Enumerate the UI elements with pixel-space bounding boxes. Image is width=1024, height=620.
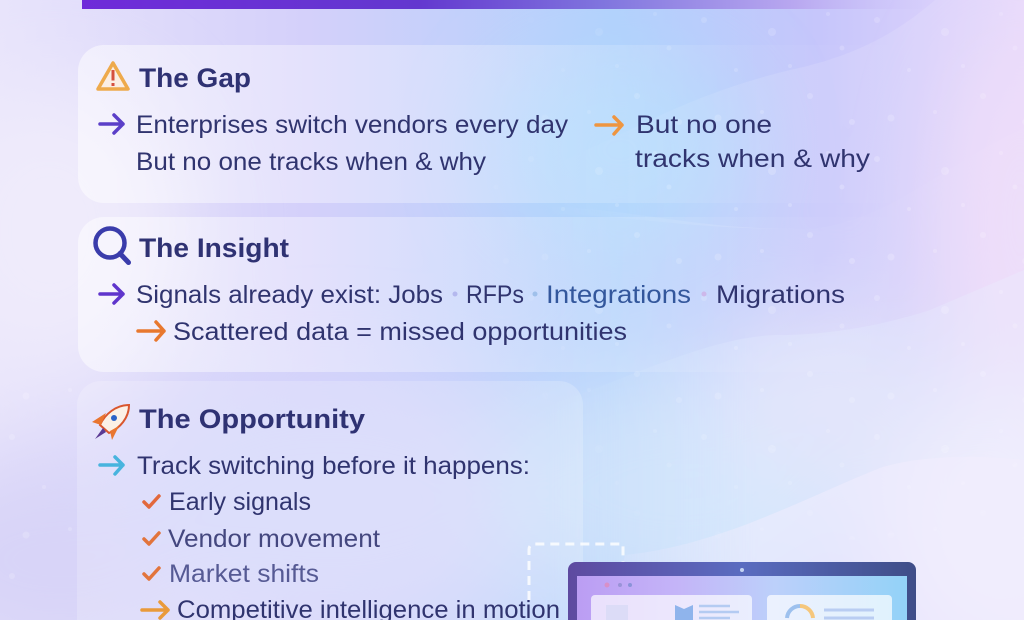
text: rfps: RFPs	[466, 281, 524, 309]
dashboard card right	[767, 595, 892, 620]
window controls	[604, 582, 632, 588]
wave layers	[624, 216, 1024, 620]
check icon	[144, 568, 159, 579]
text: enterprises switch: Enterprises switch vendors every day	[136, 111, 569, 139]
text: but no one: But no one	[636, 111, 772, 139]
text: migrations: Migrations	[716, 281, 845, 309]
laptop screen	[577, 576, 907, 620]
top banner	[82, 0, 922, 9]
check icon	[144, 496, 159, 507]
text: scattered data: Scattered data = missed opportunities	[173, 318, 627, 346]
dashed connector	[529, 544, 623, 600]
heading: the gap: The Gap	[139, 63, 251, 93]
icon: warning triangle	[98, 63, 128, 89]
text: tracks when and why: tracks when & why	[635, 145, 871, 173]
icon: magnifier	[96, 228, 128, 262]
heading: the opportunity: The Opportunity	[139, 404, 365, 434]
arrow: orange	[596, 117, 622, 134]
text: integrations: Integrations	[546, 281, 691, 309]
arrow: blue	[100, 457, 123, 474]
dashboard card left	[591, 595, 752, 620]
text: signals: Signals already exist: Jobs	[136, 281, 443, 309]
panel: the opportunity	[77, 381, 583, 620]
icon: rocket	[92, 405, 129, 440]
arrow: orange	[142, 602, 168, 618]
text: vendor movement: Vendor movement	[168, 525, 380, 553]
text: track switching: Track switching before it happens:	[137, 452, 530, 480]
arrow: purple	[100, 285, 123, 303]
laptop illustration	[568, 562, 916, 620]
panel: the insight	[78, 217, 934, 372]
arrow: purple	[100, 115, 123, 133]
panel: the gap	[78, 45, 934, 203]
text: market shifts: Market shifts	[169, 560, 319, 588]
arrow: orange	[138, 322, 164, 340]
text: but no one tracks: But no one tracks when & why	[136, 148, 487, 176]
separator dots	[452, 292, 706, 296]
heading: the insight: The Insight	[139, 233, 289, 263]
text: early signals: Early signals	[169, 488, 311, 516]
check icon	[144, 533, 159, 544]
